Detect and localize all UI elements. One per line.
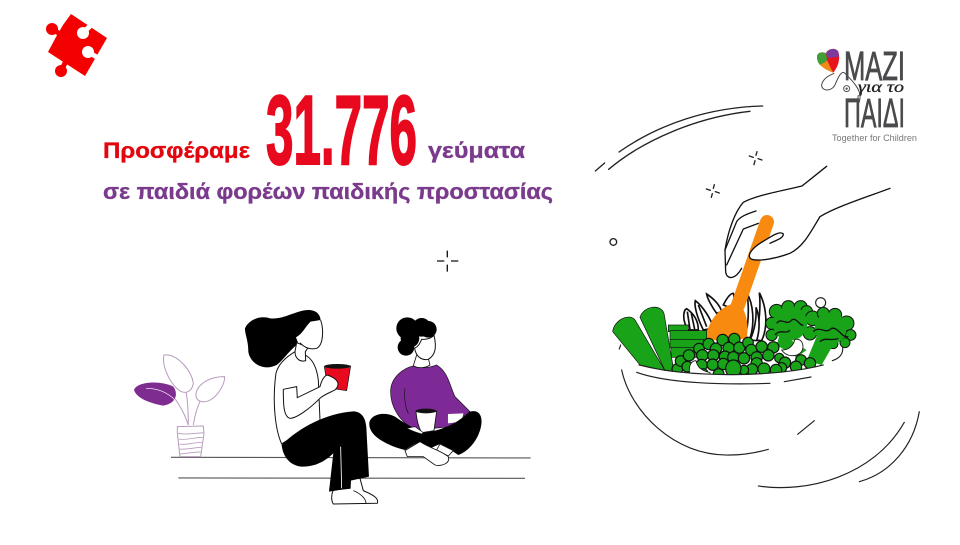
- text: gia to: για το: [858, 79, 904, 96]
- text: we offered: Προσφέραμε: [103, 138, 251, 163]
- icon: red puzzle piece: [46, 14, 107, 77]
- decorative swooshes and sparkles: [595, 106, 763, 245]
- woman: [245, 310, 378, 504]
- spoon handle: [738, 222, 767, 305]
- peas: [672, 333, 816, 379]
- bowl lines: [619, 298, 919, 488]
- bowl contents: [613, 293, 856, 390]
- cashew small: [689, 361, 710, 378]
- onion leaves: [684, 293, 766, 341]
- illustration: two people sitting with plant: [134, 251, 531, 504]
- green sticks: [613, 307, 707, 372]
- number: 31.776: 31.776: [266, 75, 417, 185]
- ledge lines: [171, 457, 531, 478]
- text: to children of child protection bodies: σε παιδιά φορέων παιδικής προστασίας: [103, 179, 553, 204]
- sparkle: [437, 251, 458, 272]
- text: meals: γεύματα: [428, 138, 526, 163]
- broccoli: [766, 301, 856, 365]
- cashew: [782, 339, 803, 356]
- hand: [725, 166, 890, 278]
- illustration: salad bowl and hand: [595, 106, 919, 488]
- plant: [134, 355, 225, 457]
- spoon head: [705, 302, 748, 342]
- logo: Mazi gia to paidi: [817, 43, 917, 144]
- bowl mask: [637, 365, 824, 390]
- boy: [369, 317, 482, 465]
- text: PAIDI: ΠΑΙΔΙ: [844, 90, 905, 136]
- text: MAZI: ΜΑΖΙ: [844, 43, 905, 89]
- text: Together for Children: Together for Children: [832, 133, 917, 144]
- title: served meals headline: [103, 75, 553, 204]
- icon: puzzle heart balloon: [817, 49, 860, 103]
